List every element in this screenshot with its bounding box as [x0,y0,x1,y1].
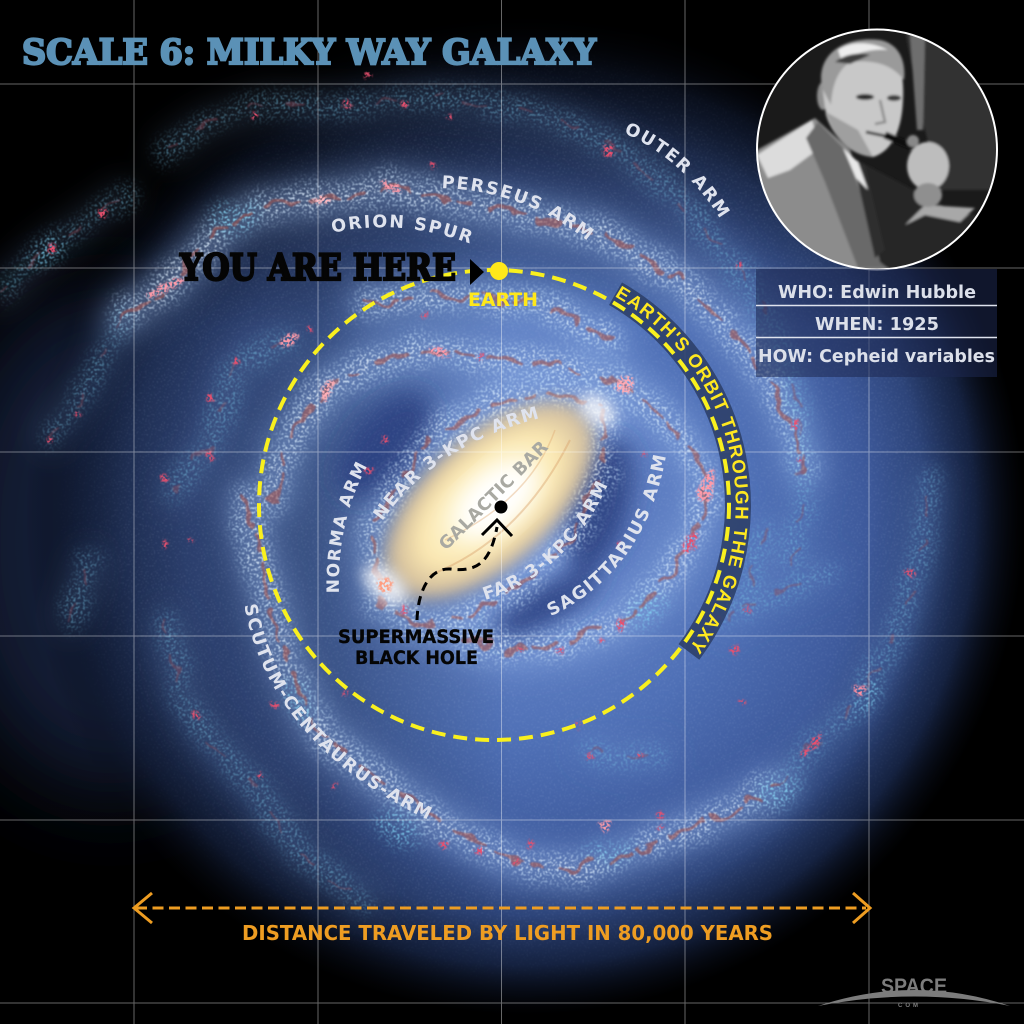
Space.com logo: SPACE [881,975,947,998]
black hole dashed arrow [417,520,512,620]
label: Far 3-KPC Arm: FAR 3-KPC ARM [482,480,608,600]
orbit label: EARTH'S ORBIT THROUGH THE GALAXY [616,286,748,655]
scale arrow [134,893,870,923]
galactic bulge [339,354,641,646]
label: Scutum-Centaurus Arm: SCUTUM-CENTAURUS-ARM [245,604,432,819]
black hole label [338,627,494,669]
you are here label: YOU ARE HERE [179,247,456,289]
arm glow [0,97,930,902]
how: HOW: Cepheid variables [758,347,995,367]
dust lanes [0,97,930,902]
dark inter-arm lanes [321,377,647,651]
bright star knots at bar ends [356,387,622,612]
arm labels [245,124,730,819]
Space.com logo [818,975,1010,1009]
scale label: DISTANCE TRAVELED BY LIGHT IN 80,000 YEARS [242,921,773,945]
Earth's orbit dashed circle [259,270,729,740]
info panel [756,269,997,377]
Earth label: EARTH [468,289,538,311]
black hole label: BLACK HOLE [355,648,478,669]
portrait of Edwin Hubble [750,25,1004,275]
star forming regions [47,74,915,866]
label: Sagittarius Arm: SAGITTARIUS ARM [547,455,666,616]
Earth marker [490,262,508,280]
label: Perseus Arm: PERSEUS ARM [443,175,594,240]
orbit band [616,294,738,652]
label: Near 3-KPC Arm: NEAR 3-KPC ARM [372,406,538,520]
black hole marker [494,500,508,514]
label: Orion Spur: ORION SPUR [332,214,472,244]
who: WHO: Edwin Hubble [778,283,976,303]
label: Norma Arm: NORMA ARM [326,462,367,592]
outer left halo [0,290,280,790]
Space.com logo: COM [898,1003,921,1009]
arrow to Earth [470,259,484,285]
label: Galactic Bar: GALACTIC BAR [440,442,548,548]
cyan star clouds [25,192,886,864]
black hole label: SUPERMASSIVE [338,627,494,648]
label: Outer Arm: OUTER ARM [626,124,730,218]
when: WHEN: 1925 [815,315,939,335]
star speckle along arms [0,97,930,902]
title: SCALE 6: MILKY WAY GALAXY [22,32,597,73]
